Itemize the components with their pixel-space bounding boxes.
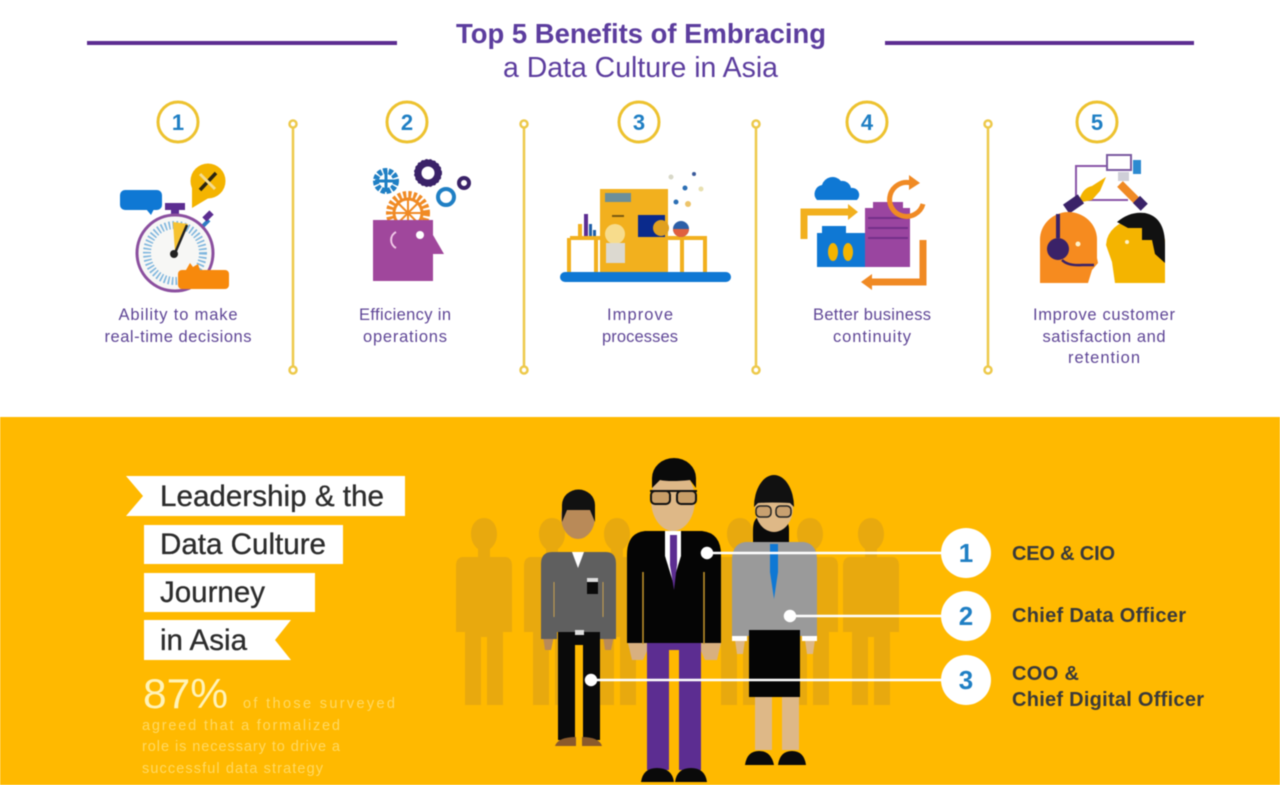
- callout 3: COO & Chief Digital Officer: 3: [959, 665, 973, 695]
- number badge 2: 2: [401, 110, 413, 135]
- caption 3: Improve: [607, 306, 673, 324]
- caption 5: satisfaction and: [1042, 328, 1166, 346]
- caption 5: Improve customer: [1033, 306, 1176, 324]
- number badge 4: [847, 102, 887, 142]
- heading ribbon: in Asia: [160, 624, 248, 657]
- icon: stopwatch: [120, 164, 229, 291]
- caption 2: [359, 306, 451, 346]
- icon: head with gears: [373, 160, 469, 281]
- title: Top 5 Benefits of Embracing: [456, 18, 826, 49]
- person: center man: [627, 458, 721, 782]
- icon: buildings and cycle: [804, 175, 923, 290]
- callout 2: Chief Data Officer: Chief Data Officer: [1012, 605, 1186, 627]
- callout 3: COO & Chief Digital Officer: COO &: [1012, 663, 1079, 685]
- number badge 2: [387, 102, 427, 142]
- caption 3: processes: [602, 328, 678, 346]
- caption 2: operations: [363, 328, 447, 346]
- callout lines: [586, 548, 945, 685]
- title: [87, 18, 1194, 84]
- icon: customer service: [1040, 155, 1165, 283]
- number badge 5: 5: [1091, 110, 1103, 135]
- statistic 87%: agreed that a formalized: [142, 718, 340, 734]
- statistic 87%: [142, 670, 395, 777]
- callout 2: Chief Data Officer: 2: [959, 601, 973, 631]
- number badge 1: [158, 102, 198, 142]
- heading ribbon: Data Culture: [160, 528, 326, 561]
- caption 4: continuity: [833, 328, 912, 346]
- caption 1: Ability to make: [118, 306, 238, 324]
- callout 3: COO & Chief Digital Officer: Chief Digital Officer: [1012, 689, 1204, 711]
- heading ribbon: Journey: [160, 576, 265, 609]
- callout 3: COO & Chief Digital Officer: [941, 655, 1204, 711]
- caption 4: Better business: [813, 306, 931, 324]
- number badge 5: [1077, 102, 1117, 142]
- statistic 87%: 87%: [143, 670, 228, 717]
- background silhouettes: [456, 518, 899, 705]
- statistic 87%: successful data strategy: [142, 761, 324, 777]
- caption 1: real-time decisions: [104, 328, 252, 346]
- number badge 3: [619, 102, 659, 142]
- caption 2: Efficiency in: [359, 306, 451, 324]
- callout 2: Chief Data Officer: [941, 591, 1186, 641]
- number badge 1: 1: [172, 110, 184, 135]
- heading ribbon: Leadership & the: [160, 480, 384, 513]
- panel: leadership: [0, 417, 1280, 785]
- person: right woman: [732, 475, 817, 765]
- caption 1: [104, 306, 252, 346]
- caption 3: [602, 306, 678, 346]
- number badge 4: 4: [861, 110, 874, 135]
- caption 5: retention: [1068, 349, 1140, 367]
- callout 1: CEO & CIO: [941, 528, 1115, 578]
- icon: process machine: [560, 172, 731, 282]
- title: a Data Culture in Asia: [503, 52, 778, 84]
- statistic 87%: role is necessary to drive a: [142, 739, 341, 755]
- caption 5: [1033, 306, 1176, 367]
- callout 1: CEO & CIO: CEO & CIO: [1012, 543, 1115, 565]
- statistic 87%: of those surveyed: [243, 696, 395, 712]
- heading ribbon: [126, 476, 405, 660]
- number badge 3: 3: [633, 110, 645, 135]
- caption 4: [813, 306, 931, 346]
- person: left man: [541, 490, 616, 746]
- callout 1: CEO & CIO: 1: [959, 538, 973, 568]
